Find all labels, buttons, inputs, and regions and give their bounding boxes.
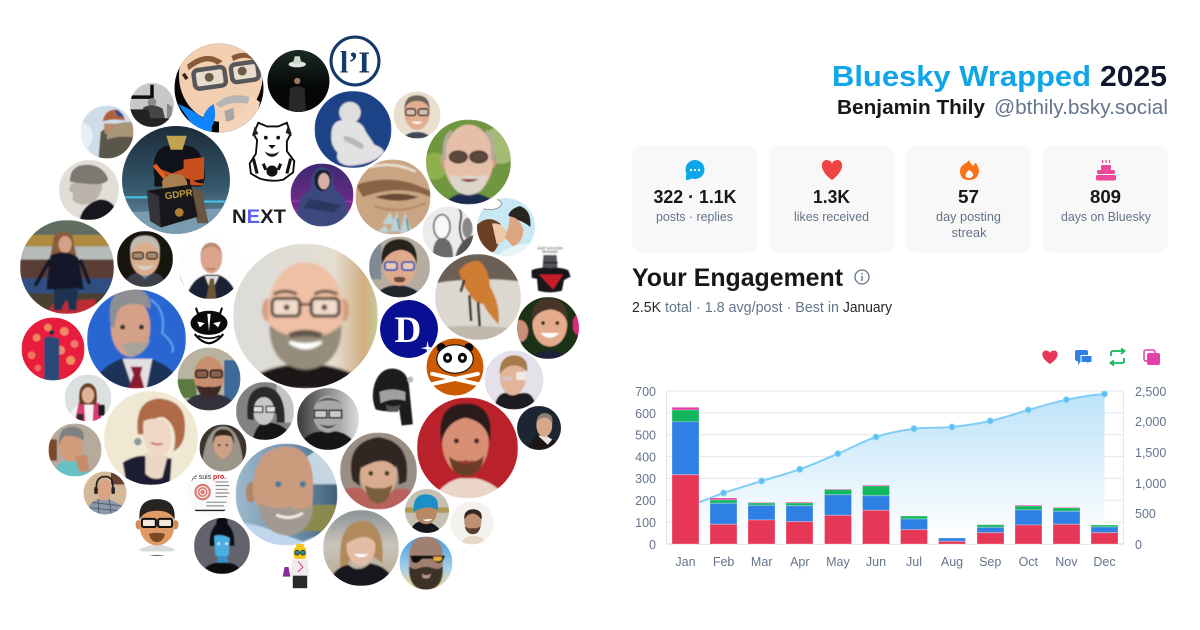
avatar: black and white sketch woman [422, 206, 474, 258]
month labels: Sep [979, 555, 1001, 569]
bar: Aug [938, 538, 966, 544]
right axis labels: 2,500 [1135, 385, 1166, 399]
stat card: days on Bluesky: 809 [1090, 187, 1121, 207]
line points [721, 391, 1108, 496]
bar: Dec [1091, 525, 1118, 544]
icon: quotes [1144, 350, 1160, 365]
user name and handle: Benjamin Thily [837, 97, 986, 119]
right axis labels: 0 [1135, 538, 1142, 552]
summary line [632, 300, 893, 316]
bar: Jun [862, 485, 890, 544]
avatar: l'I logo [329, 35, 381, 87]
avatar: blurred blond man [484, 350, 544, 410]
avatar: je suis pro badge: je suis pro. [191, 474, 226, 481]
summary line: 2.5K [632, 300, 661, 316]
icon: cake [1096, 160, 1116, 180]
bar: Sep [977, 525, 1004, 544]
stat card: streak [906, 145, 1031, 253]
avatar: dog ink drawing [250, 123, 294, 181]
icon: replies [1075, 350, 1092, 366]
avatar: grey-haired man with hand on chin [48, 424, 102, 476]
right axis labels: 2,000 [1135, 415, 1166, 429]
month labels: Oct [1019, 555, 1039, 569]
avatar: blue beanie man [405, 489, 449, 533]
stat card: streak: day posting [936, 210, 1001, 224]
left axis labels: 700 [635, 385, 656, 399]
avatar: sketched warrior [373, 368, 413, 426]
stat card: likes: likes received [794, 210, 869, 224]
left axis labels: 400 [635, 450, 656, 464]
bar: Mar [748, 502, 775, 544]
avatar: bearded man white background [450, 502, 494, 544]
avatar: black and white man with glasses [297, 388, 359, 450]
avatar: TV presenter with red tie [87, 288, 186, 388]
avatar: cat logo [190, 307, 228, 344]
avatar: je suis pro badge [191, 474, 230, 512]
avatar: man in suit white background [178, 235, 242, 299]
grid lines [666, 391, 1124, 544]
avatar: woman with auburn hair [104, 391, 198, 485]
avatar: black and white man at desk [130, 83, 174, 127]
avatar: sunglasses cartoon [400, 536, 452, 591]
bar: Feb [710, 498, 737, 544]
avatar: blue-faced woman painting [194, 517, 250, 574]
avatar: messy hair man [340, 432, 417, 510]
avatar: black knight [532, 247, 571, 292]
left axis labels: 500 [635, 428, 656, 442]
right axis labels: 1,000 [1135, 477, 1166, 491]
right axis labels: 500 [1135, 507, 1156, 521]
avatar: black and white long hair man [236, 382, 294, 440]
stat card: posts and replies [632, 145, 757, 253]
avatar: judge helmet cat reading GDPR: GDPR [164, 188, 193, 202]
icon: heart [822, 160, 842, 180]
icon: likes [1042, 350, 1058, 364]
area under cumulative line [686, 394, 1104, 544]
month labels: Apr [790, 555, 810, 569]
stat card: days on Bluesky: days on Bluesky [1061, 210, 1152, 224]
right axis labels [1135, 385, 1166, 552]
month labels: Nov [1055, 555, 1078, 569]
month labels [675, 555, 1116, 569]
avatar: lego scientist [283, 544, 310, 588]
right axis labels: 1,500 [1135, 446, 1166, 460]
month labels: Aug [941, 555, 963, 569]
bar: Oct [1015, 505, 1042, 544]
logo: NEXT: NEXT [232, 207, 286, 228]
stacked bars [672, 407, 1118, 544]
stat card: likes: 1.3K [813, 187, 850, 207]
avatar: judge helmet cat reading GDPR [122, 126, 230, 234]
left axis labels [635, 385, 656, 552]
stat card: posts and replies: 322 · 1.1K [654, 187, 736, 207]
left axis labels: 100 [635, 516, 656, 530]
avatar: hoodie on purple synthwave [290, 164, 354, 226]
avatar: smiling man in crowd [517, 297, 579, 359]
summary line: January [843, 300, 893, 316]
combo chart [635, 385, 1166, 569]
avatar: central bald man with glasses [233, 244, 378, 388]
avatar: older man with glasses dark background [117, 231, 173, 287]
avatar: l'I logo: l’I [340, 45, 370, 79]
avatar: older man in green garden [426, 120, 511, 204]
avatar: memoji with butterfly [174, 44, 264, 132]
user name and handle: @bthily.bsky.social [994, 97, 1168, 119]
stat card: streak: streak [952, 226, 987, 240]
avatar: man with black glasses, cream background [394, 92, 440, 138]
avatar: woman with pink vest [64, 374, 112, 422]
title: Bluesky Wrapped [832, 61, 1091, 93]
bar: Jul [900, 516, 928, 544]
user name and handle [837, 97, 1168, 119]
avatar: D logo [380, 300, 438, 358]
legend: engagement icons [1042, 348, 1160, 366]
bar: Jan [672, 407, 699, 544]
avatar: man with headset [84, 472, 126, 514]
icon: reposts [1110, 348, 1124, 366]
avatar: jumping fox in snow [435, 254, 521, 340]
icon: flame [960, 160, 979, 180]
avatar: D logo: D [394, 310, 421, 351]
avatar: bald man dark shirt [178, 348, 240, 410]
month labels: Jun [866, 555, 886, 569]
avatar: man on red background [417, 398, 518, 498]
left axis labels: 300 [635, 472, 656, 486]
bar: Apr [786, 502, 813, 544]
avatar: man in dark jacket [517, 406, 561, 450]
avatar: bald grey-bearded man [236, 444, 338, 546]
stat card: days on Bluesky [1043, 145, 1168, 253]
title: 2025 [1100, 61, 1167, 93]
avatar: blonde woman on the beach [323, 510, 399, 586]
avatar: black knight: JUST A FLESH [537, 247, 563, 251]
avatar: red bokeh silhouette [22, 318, 84, 380]
left axis labels: 600 [635, 407, 656, 421]
avatar: dark stage figure [268, 50, 330, 112]
month labels: Dec [1093, 555, 1116, 569]
heading: Your Engagement: Your Engagement [632, 264, 844, 292]
avatar: black knight: WOUND! [542, 250, 558, 254]
avatar: comic kiss [477, 198, 535, 256]
bar: May [824, 489, 852, 544]
icon: chat bubble [686, 160, 704, 180]
month labels: Jan [675, 555, 696, 569]
avatar: woman in grey hoodie [200, 424, 246, 472]
avatar cluster [20, 29, 583, 591]
bar: Nov [1053, 507, 1080, 544]
month labels: Jul [906, 555, 922, 569]
icon: info [855, 270, 869, 284]
avatar: close-up eye with jewels [356, 160, 430, 234]
cumulative line [686, 394, 1104, 506]
avatar: panda skull [426, 338, 484, 396]
stat card: streak: 57 [958, 187, 979, 207]
avatar: engraving man with hat [59, 160, 119, 220]
left axis labels: 0 [649, 538, 656, 552]
left axis labels: 200 [635, 494, 656, 508]
stat card: posts and replies: posts · replies [656, 210, 733, 224]
avatar: man in fur hood in snow [80, 106, 134, 158]
avatar: man with blue glasses [369, 236, 430, 298]
stat card: likes [769, 145, 894, 253]
month labels: Feb [713, 555, 734, 569]
avatar: white statue [314, 91, 392, 168]
month labels: May [826, 555, 850, 569]
avatar: woman sitting on bench [20, 220, 114, 314]
month labels: Mar [751, 555, 772, 569]
avatar: cartoon bitmoji with glasses [136, 499, 178, 556]
summary line: total · 1.8 avg/post · Best in [665, 300, 839, 316]
